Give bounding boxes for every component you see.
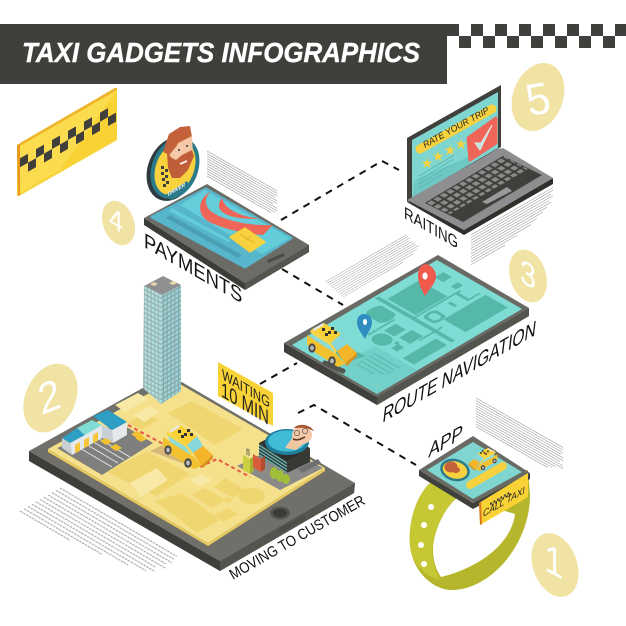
phone: city map: [29, 374, 355, 571]
waiting sign: [218, 362, 273, 430]
number badge 5: 5: [522, 74, 555, 126]
route taxi: [307, 323, 357, 367]
big taxi: [163, 425, 213, 469]
text block: rating: [471, 187, 553, 265]
number badge 3: [503, 245, 553, 307]
number badge 2: [13, 355, 88, 441]
call taxi tag: CALL TAXI: [483, 485, 525, 520]
watch taxi: [468, 448, 497, 471]
route navigation label: ROUTE NAVIGATION: [381, 315, 538, 428]
number badge 1: [523, 526, 587, 604]
rating stars: ★: [421, 155, 433, 171]
moving to customer label: MOVING TO CUSTOMER: [227, 492, 368, 583]
watch strap: [410, 470, 530, 590]
text block: route navigation: [325, 235, 424, 297]
number badge 2: 2: [34, 369, 64, 424]
bushes: [270, 467, 290, 484]
yellow city map: [48, 380, 325, 546]
checker strip: [447, 24, 626, 48]
rating stars: ★: [432, 148, 444, 164]
dashed connector: payments to rating: [281, 161, 399, 220]
dashed connector: waiting to route: [260, 363, 297, 384]
laptop: [407, 85, 553, 235]
dashed connector: payments to route: [282, 269, 343, 305]
dashed connector: moving to app: [298, 405, 416, 465]
big taxi shadow: [150, 445, 198, 468]
luggage: [243, 449, 265, 474]
driver hair: [163, 126, 192, 156]
payment card screen: [152, 189, 291, 267]
title: TAXI GADGETS INFOGRAPHICS: [22, 37, 420, 68]
smart watch: [410, 436, 530, 590]
skyscraper: [143, 276, 181, 404]
customer portrait: [285, 425, 314, 450]
taxi roof plate: [17, 88, 117, 196]
title banner: [0, 24, 447, 84]
number badge 4: 4: [109, 201, 123, 241]
driver badge: DRIVER: [168, 182, 185, 198]
payments label: PAYMENTS: [144, 229, 242, 308]
parking lot and garage: [57, 410, 153, 475]
driver face: [170, 136, 193, 170]
text block: moving to customer: [20, 488, 182, 582]
rating stars: ★: [455, 136, 467, 152]
rating label: RAITING: [404, 203, 458, 253]
route taxi shadow: [326, 344, 366, 362]
watch driver icon: [438, 455, 472, 485]
driver beard: [167, 150, 194, 178]
blue pin: [357, 314, 372, 339]
number badge 1: 1: [545, 534, 563, 589]
laptop base: [407, 178, 553, 235]
phone: route navigation: [284, 255, 529, 405]
card chip: [230, 228, 265, 252]
waiting time: 10 MIN: [221, 378, 269, 430]
route map: [292, 260, 522, 394]
call taxi tag: [479, 473, 528, 525]
rate banner: [420, 109, 492, 149]
city phone home button: [270, 506, 303, 530]
keyboard: [425, 156, 542, 222]
phone: payments: [144, 184, 309, 290]
text block: app: [476, 398, 563, 476]
laptop lid: [407, 85, 501, 202]
text block: payments: [207, 151, 277, 216]
rating stars: ★: [444, 142, 456, 158]
app label: APP: [427, 421, 464, 463]
card swoosh: [200, 191, 273, 235]
check card: [468, 118, 496, 160]
driver badge: [137, 126, 208, 209]
watch face: [419, 470, 530, 509]
laptop: RATE YOUR TRIP: [421, 105, 491, 150]
number badge 4: [96, 196, 141, 250]
waiting text: WAITING: [222, 366, 270, 412]
red pin: [418, 264, 436, 296]
number badge 3: 3: [520, 252, 536, 298]
number badge 5: [503, 56, 573, 138]
hotel with customer billboard: [237, 425, 323, 490]
rating stars: [421, 136, 467, 171]
